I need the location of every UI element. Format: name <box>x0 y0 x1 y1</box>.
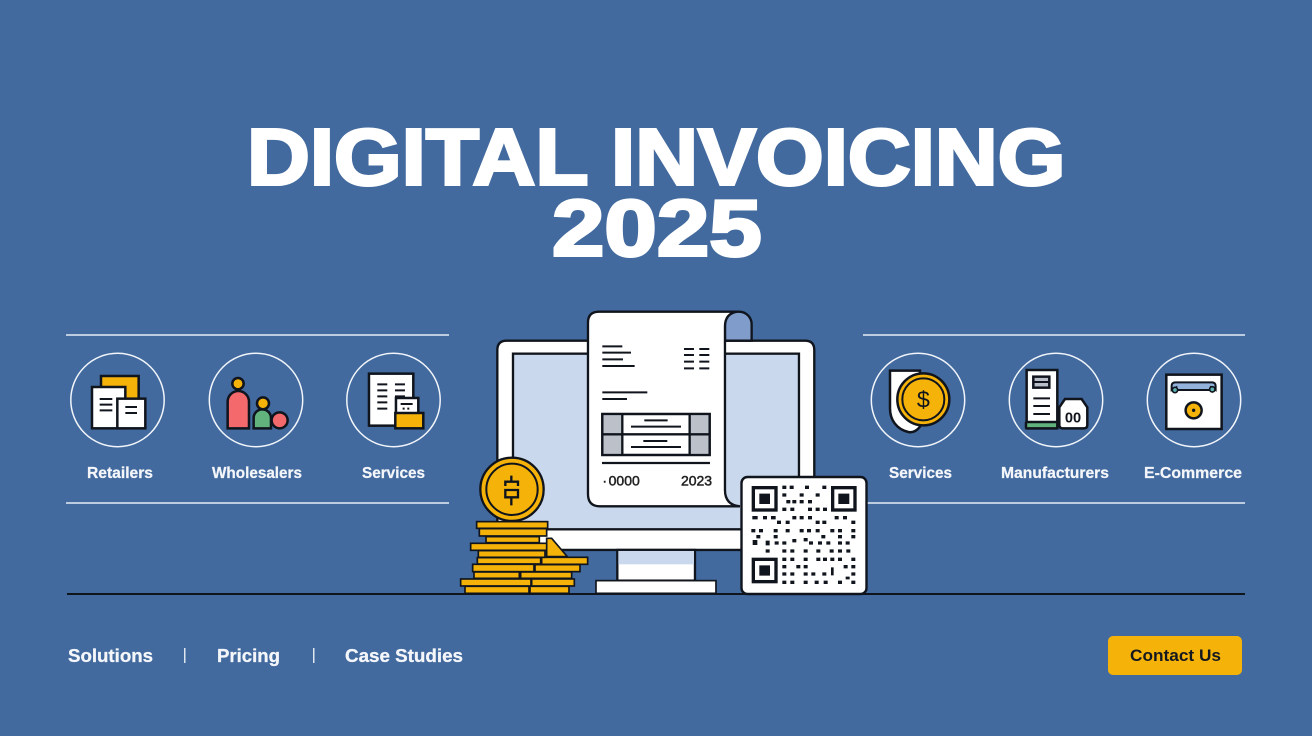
icon: services coin: $ <box>917 386 930 412</box>
icon: manufacturers: 00 <box>1065 411 1081 427</box>
navigation links: Pricing <box>217 645 280 666</box>
label: e-commerce: E-Commerce <box>1144 465 1242 482</box>
icon: wholesalers <box>209 353 303 447</box>
label: wholesalers: Wholesalers <box>212 465 302 482</box>
label: manufacturers: Manufacturers <box>1001 465 1109 482</box>
icon: manufacturers <box>1009 353 1103 447</box>
icon: services <box>347 353 440 447</box>
icon: coin stack <box>461 522 588 593</box>
title <box>247 112 1065 273</box>
contact button: Contact Us <box>1130 646 1221 665</box>
navigation links: Solutions <box>68 645 153 666</box>
icon: invoice receipt: 0000 <box>609 472 640 488</box>
navigation links: Case Studies <box>345 645 463 666</box>
icon: QR code <box>742 477 866 594</box>
icon: gold coin <box>480 458 544 521</box>
navigation links <box>68 645 463 666</box>
icon: invoice receipt: · <box>602 472 607 488</box>
panel: left audience icons <box>71 353 440 482</box>
title: DIGITAL INVOICING <box>247 112 1065 202</box>
icon: retailers <box>71 353 164 447</box>
icon: invoice receipt <box>588 312 752 506</box>
label: retailers: Retailers <box>87 465 153 482</box>
icon: monitor <box>497 341 814 593</box>
icon: e-commerce <box>1147 353 1241 447</box>
label: services right: Services <box>889 465 952 482</box>
illustration: monitor with invoice, coins and QR code <box>461 312 866 594</box>
label: services left: Services <box>362 465 425 482</box>
contact button <box>1108 636 1242 675</box>
icon: services coin <box>871 353 965 447</box>
icon: invoice receipt: 2023 <box>681 472 712 488</box>
title: 2025 <box>552 183 762 273</box>
panel: right audience icons <box>871 353 1242 482</box>
